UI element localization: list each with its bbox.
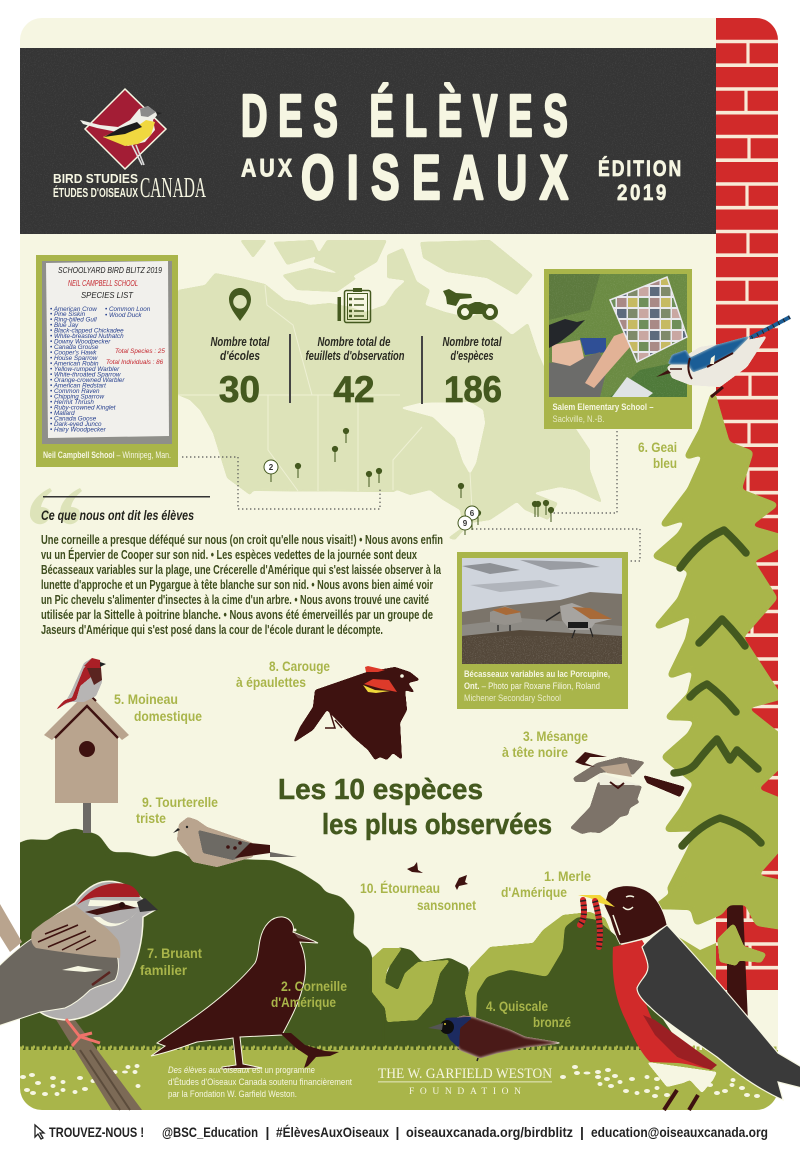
statistic: species: Nombre total — [442, 335, 502, 349]
dark hedge left — [10, 831, 390, 1060]
species labels: 9. Tourterelle — [142, 794, 218, 810]
footer contact bar: education@oiseauxcanada.org — [591, 1124, 768, 1140]
footer contact bar: oiseauxcanada.org/birdblitz — [406, 1124, 573, 1140]
species labels: bleu — [653, 455, 677, 471]
species labels: 8. Carouge — [269, 658, 330, 674]
quote body: Une corneille a presque déféqué sur nous (on croit qu'elle nous visait!) • Nous avons enfin — [41, 533, 443, 547]
quote body: Jaseurs d'Amérique qui s'est posé dans la cour de l'école durant le décompte. — [41, 623, 383, 637]
icon: clipboard and pencil — [338, 288, 370, 322]
quote body: Bécasseaux variables sur la plage, une Crécerelle d'Amérique qui s'est laissée observer à la — [41, 563, 442, 577]
statistic: schools — [210, 288, 270, 410]
bird: American robin — [578, 886, 800, 1110]
bird: chipping sparrow — [0, 881, 158, 1110]
species labels: à tête noire — [502, 744, 568, 760]
photo card: Salem Elementary School: Sackville, N.-B. — [552, 414, 604, 425]
footer contact bar — [35, 1124, 768, 1140]
species labels — [114, 439, 677, 1030]
light hedge behind tree — [678, 937, 716, 979]
brick wall — [716, 18, 778, 990]
bird: red-winged blackbird — [293, 666, 420, 760]
title: OISEAUX — [301, 143, 568, 213]
quote body: lunette d'approche et un Pygargue à tête blanche sur son nid. • Nous avons bien aimé voir — [41, 578, 433, 592]
quote body — [41, 533, 443, 637]
photo card: Neil Campbell School species list: • American Redstart — [50, 382, 106, 390]
statistic: checklists: Nombre total de — [318, 335, 391, 349]
bird: house sparrow — [50, 658, 106, 715]
species labels: familier — [140, 962, 188, 978]
heading: top 10 species — [278, 774, 552, 841]
photo card: Neil Campbell School species list: • Common Loon — [105, 306, 151, 313]
statistic: schools: 30 — [219, 369, 260, 410]
lower tree branch — [720, 927, 763, 963]
species labels: d'Amérique — [501, 884, 567, 900]
dotted leader lines — [182, 431, 640, 561]
photo card: Neil Campbell School species list: • Orange-crowned Warbler — [50, 377, 125, 384]
footer contact bar: #ÉlèvesAuxOiseaux — [276, 1124, 389, 1140]
program credit: par la Fondation W. Garfield Weston. — [168, 1089, 297, 1100]
logo: W. Garfield Weston Foundation: FOUNDATION — [409, 1087, 521, 1097]
icon: location pin — [229, 288, 251, 321]
logo: Bird Studies Canada — [53, 89, 206, 204]
photo card: Neil Campbell School species list: • Yellow-rumped Warbler — [50, 366, 120, 373]
bird: European starling pair — [407, 862, 468, 890]
numbered map pin 6 — [465, 506, 479, 520]
footer contact bar: @BSC_Education — [162, 1124, 258, 1140]
photo card: Salem Elementary School: Salem Elementary School – — [552, 402, 654, 413]
photo card: Salem Elementary School — [544, 269, 692, 429]
photo card: dunlins at Porcupine Lake: Ont. – Photo par Roxane Filion, Roland — [464, 681, 600, 692]
photo card: Neil Campbell School species list: Neil Campbell School – Winnipeg, Man. — [43, 450, 171, 461]
title — [241, 82, 568, 213]
tree trunk — [727, 899, 748, 1022]
light hedge small — [372, 948, 450, 1022]
title: AUX — [241, 154, 292, 182]
footer contact bar: | — [266, 1124, 269, 1140]
quote body: utilisée par la Sittelle à poitrine blanche. • Nous avons été émerveillés par un groupe de — [41, 608, 433, 622]
photo card: Neil Campbell School species list: • Canada Grouse — [50, 344, 99, 351]
photo card: Neil Campbell School species list: • Chipping Sparrow — [50, 394, 104, 400]
divider between statistics — [289, 334, 291, 403]
worms — [580, 900, 600, 947]
tree shadows — [674, 530, 761, 846]
photo card: Neil Campbell School species list: • Ruby-crowned Kinglet — [50, 404, 116, 412]
statistic: checklists: feuillets d'observation — [306, 349, 405, 363]
icon: cursor — [35, 1125, 44, 1139]
quote body: un Pic chevelu s'alimenter d'insectes à la cime d'un arbre. • Nous avons trouvé une cavité — [41, 593, 429, 607]
photo card: Neil Campbell School species list — [36, 255, 178, 467]
divider between statistics — [421, 336, 423, 404]
species labels: 5. Moineau — [114, 691, 178, 707]
statistic: species: 186 — [444, 369, 502, 410]
photo card: Neil Campbell School species list: Total Species : 25 — [115, 348, 165, 355]
photo card: Neil Campbell School species list: • Cooper's Hawk — [50, 350, 97, 356]
species labels: 10. Étourneau — [360, 880, 440, 896]
photo card: Neil Campbell School species list: • Black-capped Chickadee — [50, 328, 124, 334]
numbered map pin 2: 2 — [269, 463, 274, 472]
program credit: Des élèves aux oiseaux est un programme — [168, 1065, 315, 1076]
bird: mourning dove — [173, 817, 297, 867]
species labels: 2. Corneille — [281, 978, 347, 994]
photo card: Neil Campbell School species list: • American Crow — [50, 306, 97, 313]
footer contact bar: TROUVEZ-NOUS ! — [49, 1124, 144, 1140]
photo card: Neil Campbell School species list: SCHOOLYARD BIRD BLITZ 2019 — [58, 266, 162, 275]
numbered map pin 6: 6 — [470, 509, 475, 518]
photo card: Neil Campbell School species list: • Hermit Thrush — [50, 399, 94, 406]
photo card: Neil Campbell School species list: • Common Raven — [50, 388, 100, 395]
map of Canada — [178, 240, 640, 561]
heading: top 10 species: les plus observées — [322, 809, 552, 841]
quote body: vu un Épervier de Cooper sur son nid. • Les espèces vedettes de la journée sont deux — [41, 547, 417, 562]
numbered map pin 2 — [264, 460, 278, 474]
dark hedge right — [476, 917, 672, 1050]
program credit: d'Études d'Oiseaux Canada soutenu financièrement — [168, 1077, 352, 1088]
Hudson Bay — [400, 402, 485, 474]
pine tree — [656, 396, 790, 1022]
logo: Bird Studies Canada: BIRD STUDIES — [53, 172, 138, 186]
photo card: Neil Campbell School species list: • Downy Woodpecker — [50, 338, 111, 346]
dark hedge middle — [386, 948, 470, 1050]
birdhouse — [44, 692, 129, 833]
numbered map pin 9 — [458, 516, 472, 530]
bird: American crow — [151, 917, 339, 1069]
icon: bird and binoculars — [443, 289, 496, 318]
species labels: 1. Merle — [544, 868, 591, 884]
photo card: dunlins at Porcupine Lake: Bécasseaux variables au lac Porcupine, — [464, 669, 610, 680]
photo card: dunlins at Porcupine Lake: Michener Secondary School — [464, 693, 561, 704]
species labels: 3. Mésange — [523, 728, 588, 744]
hedges and grass — [10, 831, 778, 1110]
species labels: 6. Geai — [638, 439, 677, 455]
program credit — [168, 1065, 352, 1100]
edition badge: 2019 — [617, 182, 666, 205]
photo card: Neil Campbell School species list: • Wood Duck — [105, 312, 142, 319]
statistic: schools: Nombre total — [210, 335, 270, 349]
title: DES ÉLÈVES — [241, 82, 568, 149]
footer contact bar: | — [396, 1124, 399, 1140]
photo card: Neil Campbell School species list: • American Robin — [50, 360, 99, 368]
photo card: dunlins at Porcupine Lake — [457, 552, 628, 709]
statistic: checklists — [306, 288, 405, 410]
icon: quotation marks — [30, 488, 82, 524]
photo card: Neil Campbell School species list: • Ring-billed Gull — [50, 316, 97, 324]
logo: W. Garfield Weston Foundation: THE W. GARFIELD WESTON — [378, 1066, 552, 1082]
tree foliage — [656, 396, 790, 928]
statistic: species — [442, 289, 502, 410]
map pins — [271, 428, 554, 535]
light hedge large — [465, 912, 611, 1018]
logo: Bird Studies Canada: CANADA — [140, 173, 206, 204]
header band — [20, 48, 716, 234]
photo card: Neil Campbell School species list: • White-breasted Nuthatch — [50, 333, 124, 340]
species labels: bronzé — [533, 1014, 571, 1030]
bird: blue jay — [656, 317, 790, 397]
species labels: d'Amérique — [271, 994, 336, 1010]
photo card: Neil Campbell School species list: • Blue Jay — [50, 322, 79, 329]
photo card: Neil Campbell School species list: • Hairy Woodpecker — [50, 426, 107, 434]
quotation panel: what students said — [30, 488, 443, 637]
numbered map pin 9: 9 — [463, 519, 468, 528]
species labels: 7. Bruant — [147, 945, 202, 961]
species labels: 4. Quiscale — [486, 998, 548, 1014]
photo card: Neil Campbell School species list: • House Sparrow — [50, 355, 98, 362]
edition badge: ÉDITION — [598, 156, 681, 182]
statistic: species: d'espèces — [450, 349, 494, 363]
species labels: sansonnet — [417, 897, 476, 913]
heading: top 10 species: Les 10 espèces — [278, 774, 483, 806]
photo card: Neil Campbell School species list: • Canada Goose — [50, 416, 97, 422]
statistic: schools: d'écoles — [220, 349, 260, 363]
species labels: triste — [136, 810, 166, 826]
photo card: Neil Campbell School species list: SPECIES LIST — [81, 291, 134, 300]
photo card: Neil Campbell School species list: • White-throated Sparrow — [50, 372, 121, 378]
species labels: domestique — [134, 708, 202, 724]
logo: Bird Studies Canada: ÉTUDES D'OISEAUX — [53, 185, 138, 200]
photo card: Neil Campbell School species list: Total Individuals : 86 — [106, 359, 164, 366]
pebbles — [20, 1064, 760, 1098]
photo card: Neil Campbell School species list: NEIL CAMPBELL SCHOOL — [68, 279, 138, 288]
bird: black-capped chickadee — [570, 752, 685, 834]
branch — [0, 904, 142, 1110]
logo: W. Garfield Weston Foundation — [378, 1066, 552, 1097]
footer contact bar: | — [580, 1124, 584, 1140]
quote heading: Ce que nous ont dit les élèves — [41, 507, 194, 523]
photo card: Neil Campbell School species list: • Dark-eyed Junco — [50, 421, 102, 428]
grass — [20, 1050, 778, 1110]
photo card: Neil Campbell School species list: • Pine Siskin — [50, 311, 86, 318]
statistic: checklists: 42 — [333, 369, 375, 410]
edition badge — [598, 156, 681, 205]
species labels: à épaulettes — [236, 674, 306, 690]
bird: common grackle — [428, 1016, 562, 1061]
photo card: Neil Campbell School species list: • Mallard — [50, 410, 75, 417]
